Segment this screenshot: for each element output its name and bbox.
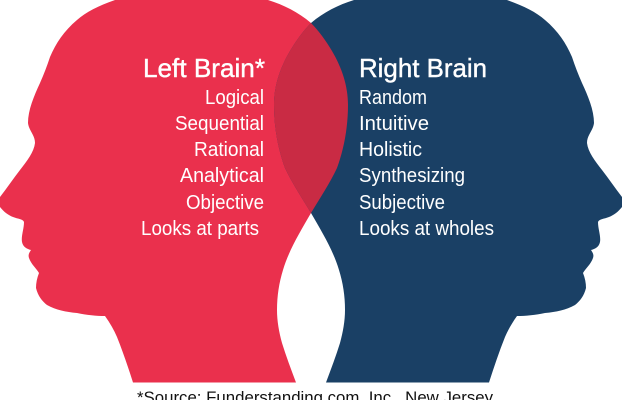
right brain trait: holistic: Holistic (359, 139, 422, 161)
right head silhouette (274, 0, 622, 382)
right brain trait: subjective: Subjective (359, 192, 445, 214)
right brain trait: intuitive: Intuitive (359, 113, 429, 135)
left brain trait: sequential: Sequential (175, 113, 264, 135)
left brain trait: looks at parts: Looks at parts (141, 218, 259, 240)
left brain trait: logical: Logical (205, 87, 264, 109)
left brain heading: Left Brain* (143, 53, 265, 83)
right brain trait: looks at wholes: Looks at wholes (359, 218, 494, 240)
right brain text block (359, 53, 494, 240)
left brain trait: analytical: Analytical (180, 165, 264, 187)
left head silhouette (0, 0, 348, 382)
left brain text block (141, 53, 265, 240)
overlap lens between the two heads (274, 23, 348, 213)
left brain trait: objective: Objective (186, 192, 264, 214)
left brain trait: rational: Rational (194, 139, 264, 161)
right brain heading: Right Brain (359, 53, 487, 83)
right brain trait: random: Random (359, 87, 427, 109)
right brain trait: synthesizing: Synthesizing (359, 165, 465, 187)
